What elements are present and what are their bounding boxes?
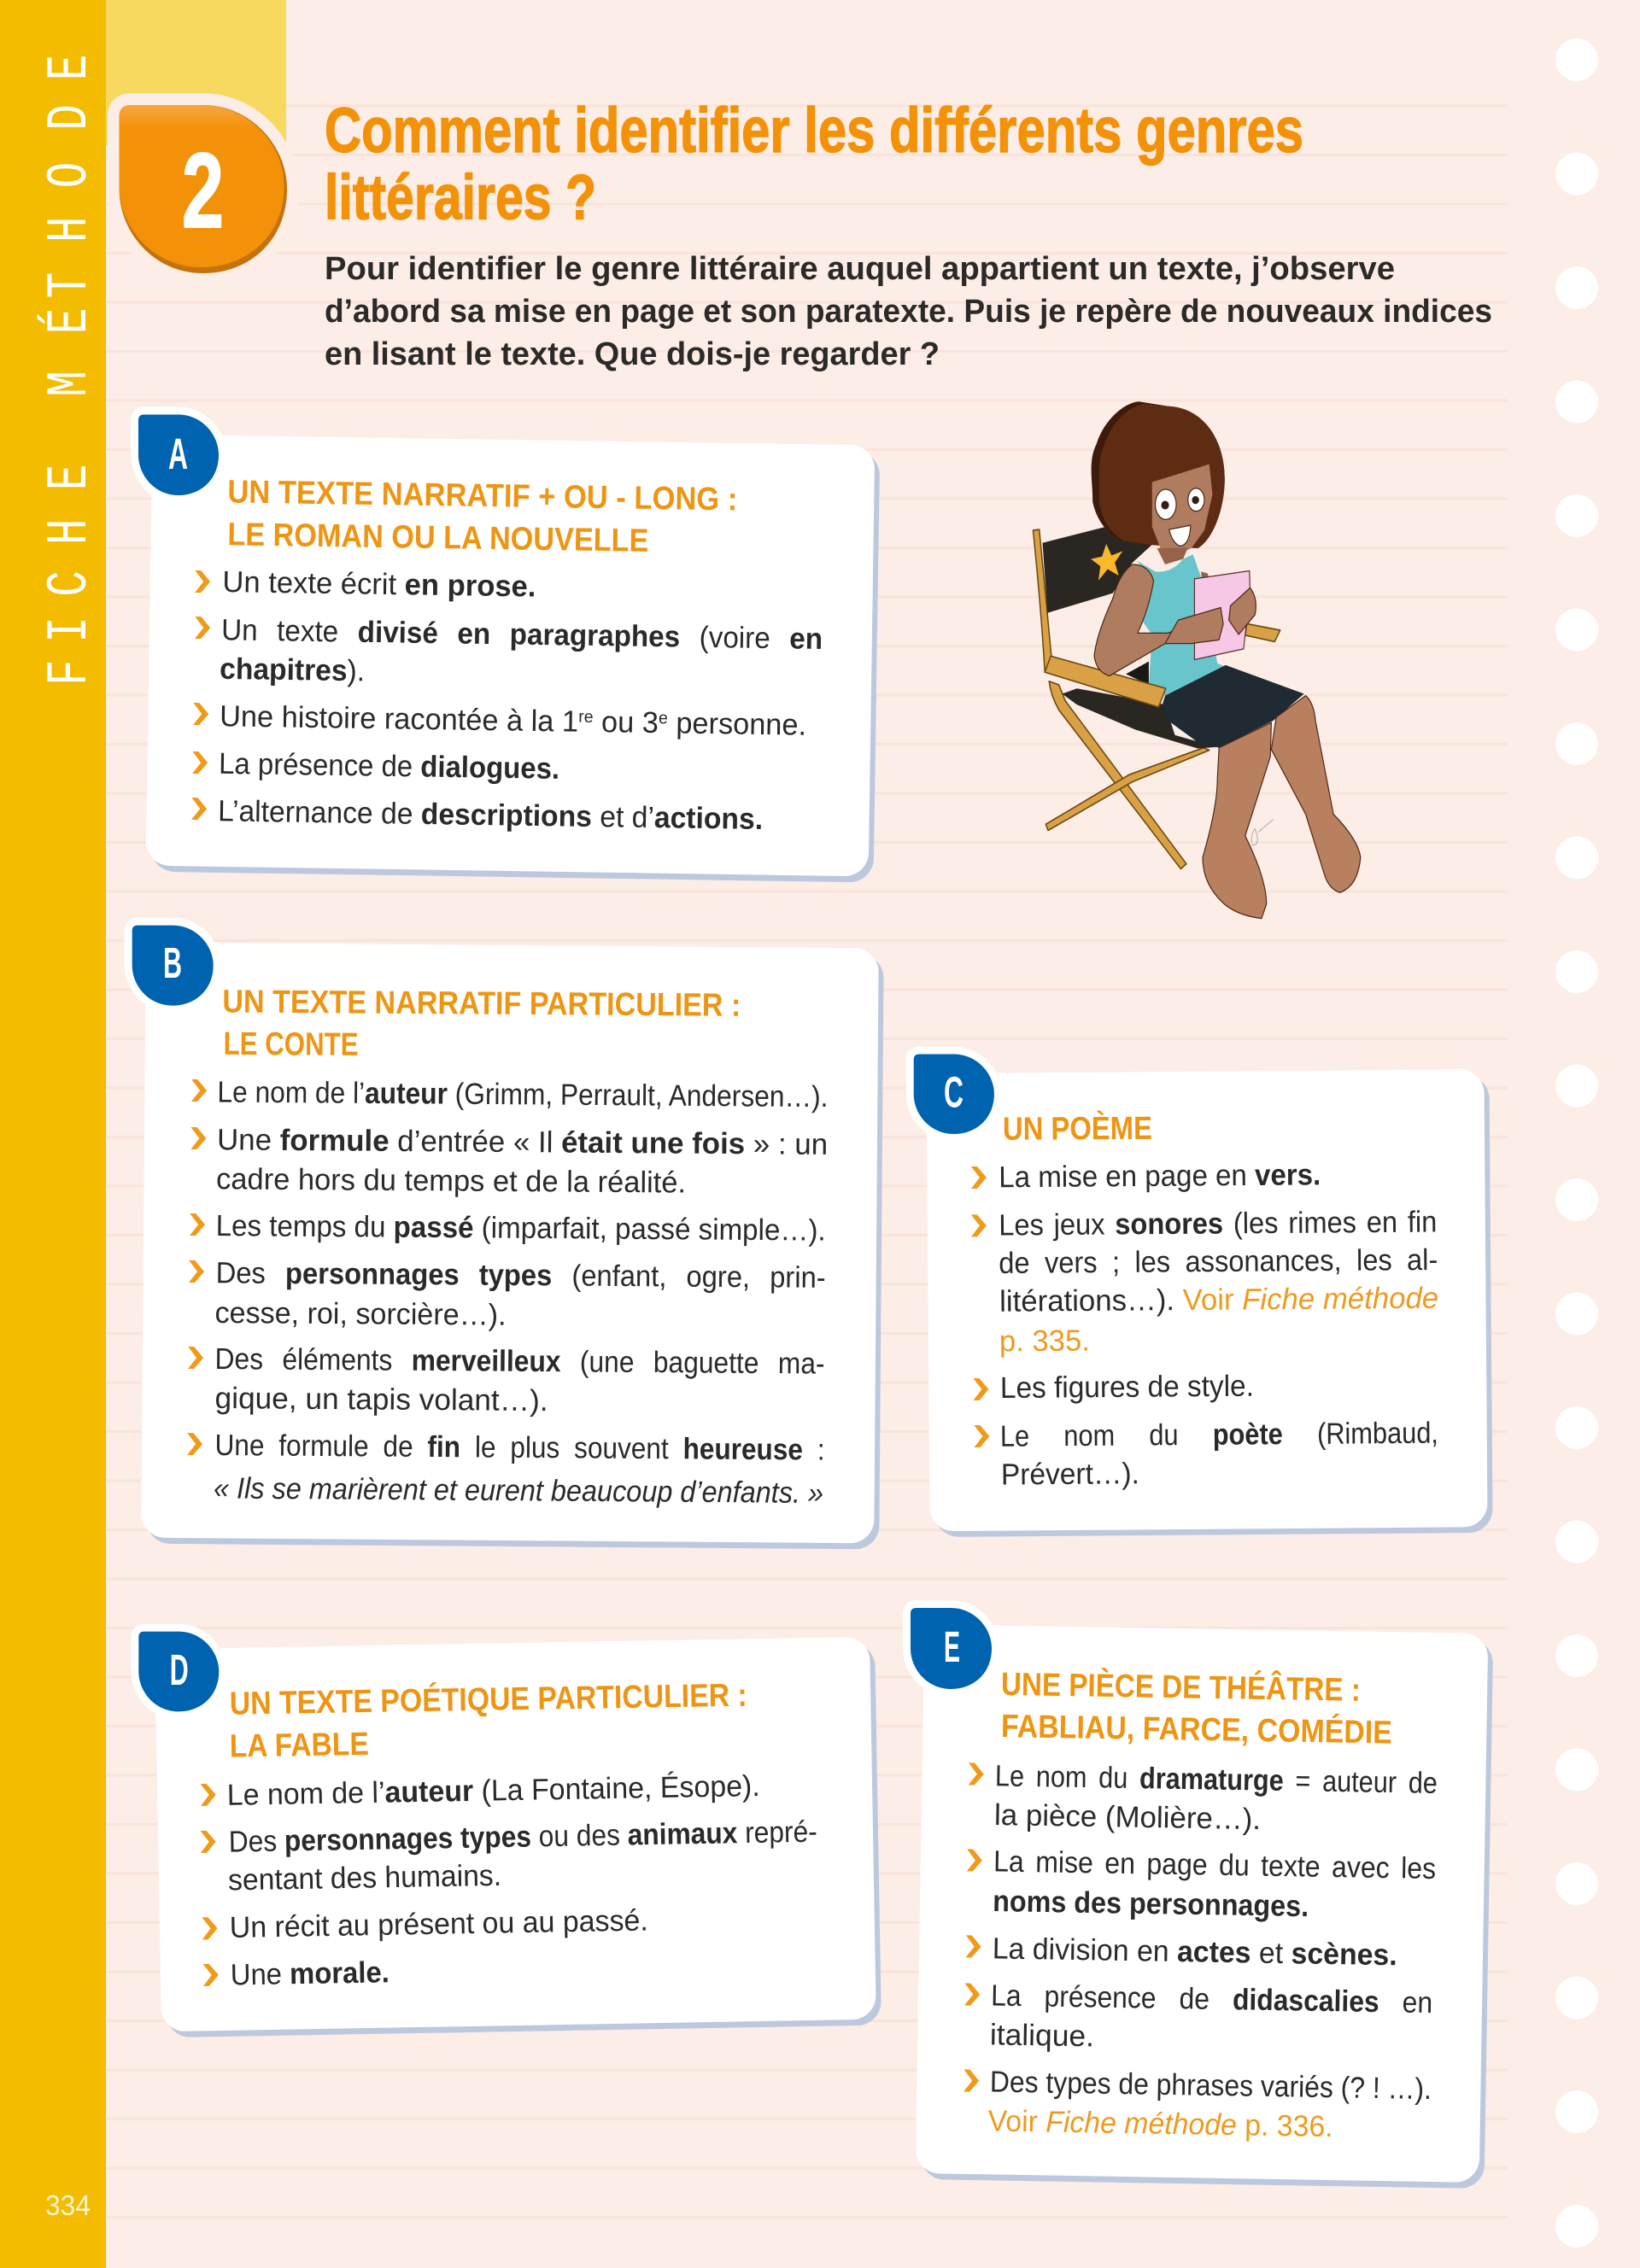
list C [971,1158,1438,1491]
list B: gique, un tapis volant…). [214,1382,548,1418]
list E: La mise en page du texte avec les [993,1844,1436,1885]
list A: La présence de dialogues. [219,747,559,786]
badge C: C [944,1067,964,1117]
list D: Une morale. [230,1955,390,1991]
list B: cadre hors du temps et de la réalité. [216,1162,686,1200]
list D: sentant des humains. [228,1859,501,1897]
heading D [229,1676,747,1764]
list A: Une histoire racontée à la 1 [220,699,585,739]
title: Comment identifier les différents genres [325,95,1303,166]
sidebar label: FICHE MÉTHODE [37,55,103,686]
badge C [914,1054,994,1134]
list D: Des personnages types ou des animaux repré- [228,1815,817,1859]
badge A: A [168,430,188,478]
badge B [132,926,214,1006]
heading A: LE ROMAN OU LA NOUVELLE [227,517,649,559]
illustration: girl reading on director chair [1033,401,1361,919]
intro text: Pour identifier le genre littéraire auquel appartient un texte, j’observe [325,251,1395,287]
heading D: UN TEXTE POÉTIQUE PARTICULIER : [229,1676,747,1722]
badge B: B [163,938,182,987]
list B: Une formule d’entrée « Il était une fois » : un [217,1123,828,1161]
panel D: la fable [138,1632,882,2037]
yellow tab [106,0,286,145]
heading B: UN TEXTE NARRATIF PARTICULIER : [222,984,741,1024]
heading E: FABLIAU, FARCE, COMÉDIE [1001,1707,1392,1751]
binder holes [1555,38,1598,2248]
heading B [222,984,741,1063]
panel E: une pièce de théâtre [911,1608,1493,2189]
list C: Les jeux sonores (les rimes en fin [999,1205,1437,1242]
heading A: UN TEXTE NARRATIF + OU - LONG : [227,474,738,517]
list E: Le nom du dramaturge = auteur de [995,1759,1438,1800]
intro text: en lisant le texte. Que dois-je regarder ? [325,336,940,372]
panel A: le roman ou la nouvelle [138,415,880,882]
list A [191,565,823,836]
list E: la pièce (Molière…). [994,1798,1261,1836]
list A: Un texte écrit en prose. [222,565,536,604]
heading E [1001,1665,1392,1751]
list C: litérations…). Voir Fiche méthode [999,1282,1438,1318]
list C: Prévert…). [1001,1457,1139,1491]
list C: de vers ; les assonances, les al- [999,1243,1438,1280]
list A: e [659,709,668,728]
list E: Voir Fiche méthode p. 336. [987,2104,1333,2143]
badge E [911,1608,992,1689]
badge D [138,1632,219,1711]
heading D: LA FABLE [229,1727,369,1764]
list B: « Ils se marièrent et eurent beaucoup d’enfants. » [214,1471,823,1510]
list A: L’alternance de descriptions et d’actions. [218,794,763,836]
list E [964,1759,1438,2143]
list C: La mise en page en vers. [999,1158,1321,1194]
list A: Un texte divisé en paragraphes (voire en [221,613,823,656]
list B: Le nom de l’auteur (Grimm, Perrault, Andersen…). [217,1076,829,1114]
heading B: LE CONTE [223,1026,359,1063]
badge A [138,415,219,495]
list A: chapitres). [220,652,365,687]
number 2: 2 [182,132,224,250]
list B: Des personnages types (enfant, ogre, prin- [216,1256,826,1295]
heading A [227,474,738,559]
number badge 2 [120,105,287,273]
list B: cesse, roi, sorcière…). [214,1296,507,1332]
list E: La division en actes et scènes. [992,1932,1397,1972]
list E: noms des personnages. [993,1885,1309,1923]
list C: Les figures de style. [1000,1370,1254,1405]
title [325,95,1303,232]
intro text: d’abord sa mise en page et son paratexte. Puis je repère de nouveaux indices [325,294,1492,330]
sidebar: fiche méthode [0,0,106,2268]
list B: Des éléments merveilleux (une baguette ma- [214,1342,825,1381]
list B [187,1076,829,1510]
list E: La présence de didascalies en [991,1979,1432,2020]
list B: Les temps du passé (imparfait, passé simple…). [216,1209,826,1248]
list A: personne. [668,706,806,742]
list D: Le nom de l’auteur (La Fontaine, Ésope). [226,1769,760,1812]
heading C: UN POÈME [1003,1109,1152,1148]
list E: Des types de phrases variés (? ! …). [990,2066,1432,2106]
title: littéraires ? [325,162,596,232]
panel B: le conte [132,926,884,1549]
page number: 334 [45,2189,91,2221]
list D: Un récit au présent ou au passé. [229,1903,648,1944]
list E: italique. [990,2018,1094,2053]
badge D: D [170,1645,189,1694]
list A: ou 3 [593,705,659,739]
intro text [325,251,1492,372]
badge E: E [944,1622,960,1671]
list D [201,1769,817,1991]
list C: p. 335. [999,1324,1090,1358]
heading E: UNE PIÈCE DE THÉÂTRE : [1001,1665,1361,1709]
list C: Le nom du poète (Rimbaud, [1000,1417,1438,1453]
list B: Une formule de fin le plus souvent heureuse : [214,1429,825,1467]
list A: re [578,708,594,727]
panel C: un poème [914,1054,1493,1537]
